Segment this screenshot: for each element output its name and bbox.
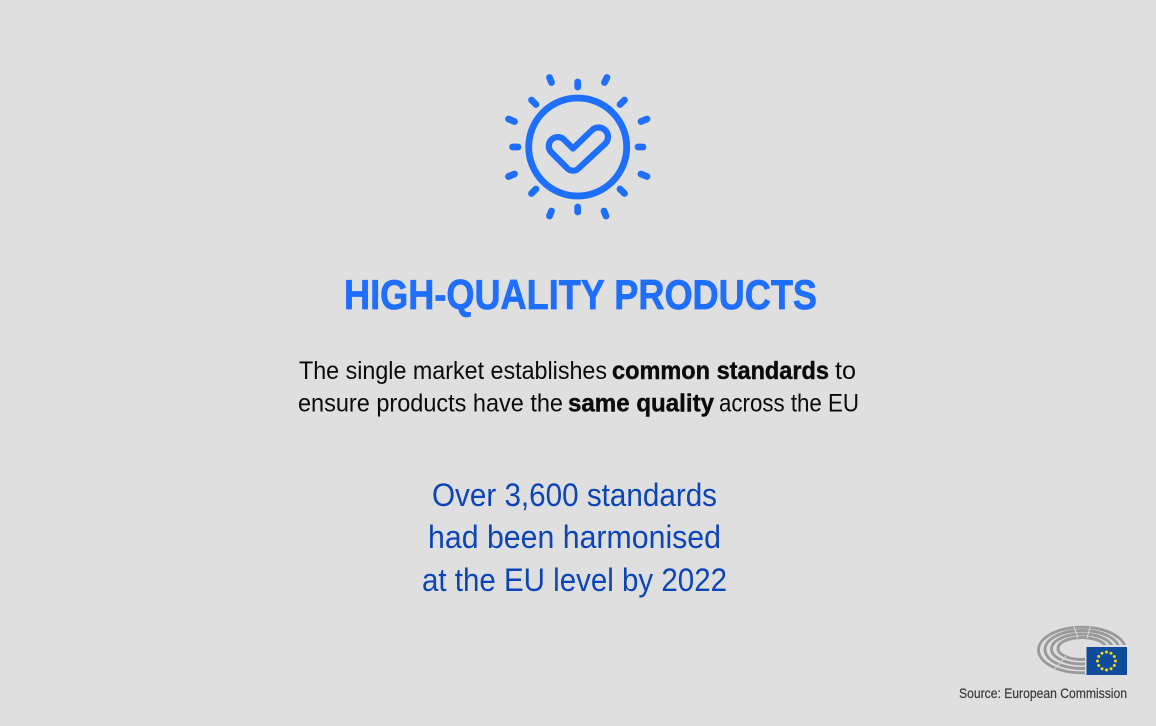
text block: single market description (298, 357, 859, 418)
text block: standards statistic (422, 477, 727, 598)
text block: single market description: The single market establishes (299, 357, 607, 385)
text block: standards statistic: at the EU level by 2022 (422, 562, 727, 598)
text block: single market description: common standards (612, 357, 829, 385)
text block: standards statistic: Over 3,600 standards (432, 477, 717, 513)
text block: single market description: same quality (568, 390, 714, 418)
icon: European Parliament logo (1038, 624, 1128, 676)
EU flag (1086, 647, 1127, 675)
text block: standards statistic: had been harmonised (428, 519, 721, 555)
text block: single market description: to (835, 357, 856, 385)
icon: sun with check mark (508, 78, 647, 216)
source note: Source: European Commission (959, 685, 1127, 701)
title: HIGH-QUALITY PRODUCTS (344, 271, 817, 318)
text block: single market description: ensure products have the (298, 390, 563, 418)
text block: single market description: across the EU (719, 390, 859, 418)
